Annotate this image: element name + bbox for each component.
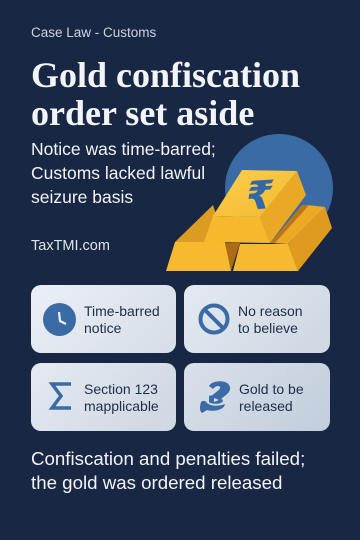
conclusion: Confiscation and penalties failed; xyxy=(31,448,305,469)
title xyxy=(31,55,300,132)
label: Section 123 xyxy=(84,381,158,397)
label xyxy=(238,303,303,336)
illustration: gold bars xyxy=(166,134,333,271)
label xyxy=(84,303,160,336)
icon: prohibited xyxy=(198,304,230,334)
source: TaxTMI.com xyxy=(31,238,110,254)
subtitle xyxy=(31,139,216,207)
conclusion: the gold was ordered released xyxy=(31,472,282,493)
card: gold to be released xyxy=(184,363,330,431)
subtitle: Customs lacked lawful xyxy=(31,163,205,183)
label: No reason xyxy=(238,303,303,319)
label xyxy=(84,381,159,414)
card: time-barred notice xyxy=(31,285,176,353)
icon: rupee symbol: ₹ xyxy=(242,172,277,220)
icon: sigma xyxy=(48,382,71,410)
label: to believe xyxy=(238,320,298,336)
label: Gold to be xyxy=(239,381,304,397)
title: order set aside xyxy=(31,92,254,132)
label: notice xyxy=(84,320,121,336)
conclusion xyxy=(31,448,305,493)
label xyxy=(239,381,304,414)
subtitle: seizure basis xyxy=(31,187,133,207)
icon: clock xyxy=(43,303,76,336)
card: section 123 xyxy=(31,363,176,431)
title: Gold confiscation xyxy=(31,55,300,95)
card: no reason to believe xyxy=(184,285,330,353)
label: released xyxy=(239,398,293,414)
label: Time-barred xyxy=(84,303,160,319)
icon: hand with question shape xyxy=(200,381,230,413)
category label: Case Law - Customs xyxy=(31,25,156,40)
subtitle: Notice was time-barred; xyxy=(31,139,216,159)
label: mapplicable xyxy=(84,398,159,414)
